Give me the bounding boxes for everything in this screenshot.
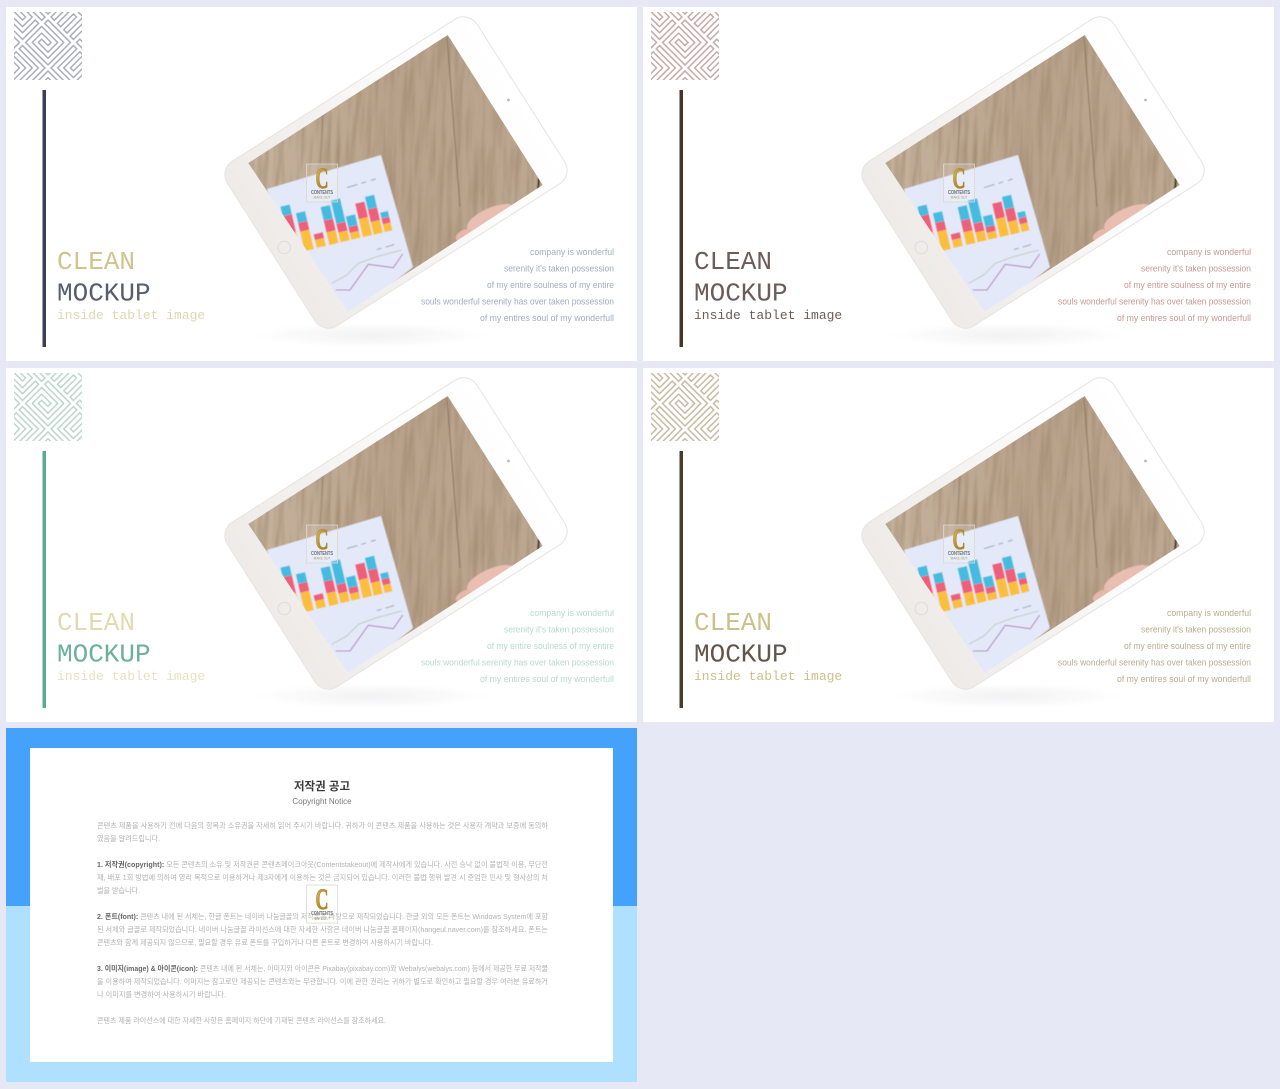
section 3: image and icon bbox=[97, 964, 548, 999]
heading: MOCKUP bbox=[57, 278, 151, 308]
section 3: image and icon: 나 이미지를 변경하여 사용하시기 바랍니다. bbox=[97, 990, 226, 999]
right text block: of my entire soulness of my entire bbox=[487, 280, 614, 290]
notice title: 저작권 공고 bbox=[294, 779, 350, 793]
section 2: font: 된 서체와 글꼴로 제작되었습니다. 네이버 나눔글꼴 라이선스에 대한 자세한 사항은 네이버 나눔글꼴 홈페이지(hangeul.naver.com)를 참조하세요. 폰트는 bbox=[97, 925, 548, 934]
heading: inside tablet image bbox=[694, 669, 842, 684]
right text block: souls wonderful serenity has over taken possession bbox=[421, 296, 614, 306]
heading: inside tablet image bbox=[694, 308, 842, 323]
logo watermark: MAKE OUT bbox=[314, 196, 330, 200]
heading: inside tablet image bbox=[57, 308, 205, 323]
heading bbox=[694, 247, 842, 323]
logo watermark bbox=[306, 163, 338, 202]
section 1: copyright: 1. 저작권(copyright): 모든 콘텐츠의 소유 및 저작권은 콘텐츠메이크아웃(Contentstakeout)에 제작사에게 있습니다. 사전 승낙 없이 불법적 이용, 무단전 bbox=[97, 860, 548, 869]
maze pattern tile bbox=[0, 333, 118, 473]
logo watermark bbox=[944, 524, 974, 563]
right text block bbox=[421, 608, 614, 684]
tablet mockup bbox=[854, 1, 1210, 349]
logo watermark bbox=[944, 163, 974, 202]
notice subtitle: Copyright Notice bbox=[292, 797, 352, 806]
heading: CLEAN bbox=[694, 608, 772, 638]
logo watermark: CONTENTS bbox=[948, 551, 971, 557]
right text block: company is wonderful bbox=[530, 608, 614, 618]
logo watermark: MAKE OUT bbox=[951, 196, 967, 200]
right text block: company is wonderful bbox=[1167, 247, 1251, 257]
panel: copyright notice slide bbox=[6, 728, 637, 1082]
vertical accent bar bbox=[680, 90, 683, 347]
right text block bbox=[1058, 247, 1251, 323]
heading: MOCKUP bbox=[694, 640, 788, 670]
heading: MOCKUP bbox=[694, 278, 788, 308]
logo watermark: CONTENTS bbox=[311, 551, 334, 557]
right text block: of my entires soul of my wonderfull bbox=[480, 674, 614, 684]
section 3: image and icon: 3. 이미지(image) & 아이콘(icon): 콘텐츠 내에 된 서체는, 이미지와 아이콘은 Pixabay(pixabay.com)와 Webalys(webalys.com) 등에서 제공한 무료 저작물 bbox=[97, 964, 548, 973]
section 3: image and icon: 을 이용하여 제작되었습니다. 이미지는 참고로만 제공되는 콘텐츠와는 무관합니다. 이에 관한 권리는 귀하가 별도로 확인하고 필요할 경우 여러분 유료하거 bbox=[97, 977, 548, 986]
maze pattern tile bbox=[0, 0, 118, 112]
right text block: serenity it's taken possession bbox=[504, 624, 614, 634]
right text block: souls wonderful serenity has over taken possession bbox=[421, 658, 614, 668]
right text block bbox=[1058, 608, 1251, 684]
right text block: company is wonderful bbox=[530, 247, 614, 257]
logo watermark: MAKE OUT bbox=[951, 556, 967, 560]
heading bbox=[57, 247, 205, 323]
closing line: 콘텐츠 제품 라이선스에 대한 자세한 사항은 홈페이지 하단에 기재된 콘텐츠 라이선스를 참조하세요. bbox=[97, 1016, 386, 1025]
right text block: serenity it's taken possession bbox=[1141, 264, 1251, 274]
intro paragraph bbox=[97, 821, 548, 843]
right text block: serenity it's taken possession bbox=[1141, 624, 1251, 634]
tablet mockup bbox=[217, 362, 573, 710]
maze pattern tile bbox=[615, 333, 755, 473]
right text block: of my entires soul of my wonderfull bbox=[480, 313, 614, 323]
right text block bbox=[421, 247, 614, 323]
heading: CLEAN bbox=[694, 247, 772, 277]
heading bbox=[57, 608, 205, 684]
section 2: font bbox=[97, 912, 548, 947]
section 1: copyright: 재, 배포 1회 방법에 의하여 영리 목적으로 이용하거나 제3자에게 이용하는 것은 금지되어 있습니다. 이러한 불법 행위 발견 시 준엄한 민사 및 형사상의 처 bbox=[97, 873, 548, 882]
heading: inside tablet image bbox=[57, 669, 205, 684]
intro paragraph: 였음을 알려드립니다. bbox=[97, 834, 160, 843]
section 2: font: 콘텐츠와 함께 제공되지 않으므로, 필요할 경우 유료 폰트를 구입하거나 다른 폰트로 변경하여 사용하시기 바랍니다. bbox=[97, 938, 433, 947]
right text block: of my entires soul of my wonderfull bbox=[1117, 674, 1251, 684]
heading bbox=[694, 608, 842, 684]
logo watermark: CONTENTS bbox=[311, 911, 334, 917]
logo watermark: MAKE OUT bbox=[314, 556, 330, 560]
right text block: of my entire soulness of my entire bbox=[487, 641, 614, 651]
section 1: copyright: 벌을 받습니다. bbox=[97, 886, 140, 895]
logo watermark bbox=[306, 884, 338, 923]
heading: CLEAN bbox=[57, 608, 135, 638]
right text block: serenity it's taken possession bbox=[504, 264, 614, 274]
right text block: company is wonderful bbox=[1167, 608, 1251, 618]
logo watermark: CONTENTS bbox=[311, 190, 334, 196]
logo watermark: C bbox=[953, 163, 965, 195]
logo watermark: MAKE OUT bbox=[314, 916, 330, 920]
vertical accent bar bbox=[42, 451, 46, 708]
logo watermark: C bbox=[316, 884, 328, 916]
panel: slide 1 navy bbox=[0, 0, 637, 361]
vertical accent bar bbox=[42, 90, 46, 347]
right text block: of my entires soul of my wonderfull bbox=[1117, 313, 1251, 323]
intro paragraph: 콘텐츠 제품을 사용하기 전에 다음의 항목과 소유권을 자세히 읽어 주시기 바랍니다. 귀하가 이 콘텐츠 제품을 사용하는 것은 사용자 계약과 보증에 동의하 bbox=[97, 821, 548, 830]
right text block: souls wonderful serenity has over taken possession bbox=[1058, 296, 1251, 306]
right text block: of my entire soulness of my entire bbox=[1124, 641, 1251, 651]
logo watermark: C bbox=[953, 524, 965, 556]
section 2: font: 2. 폰트(font): 콘텐츠 내에 된 서체는, 한글 폰트는 네이버 나눔글꼴의 저작물을 바탕으로 제작되었습니다. 한글 외의 모든 폰트는 Windows System에 포함 bbox=[97, 912, 548, 921]
tablet mockup bbox=[217, 1, 573, 349]
panel: slide 3 teal bbox=[0, 333, 637, 722]
right text block: souls wonderful serenity has over taken possession bbox=[1058, 658, 1251, 668]
panel: slide 4 olive bbox=[615, 333, 1274, 722]
logo watermark bbox=[306, 524, 338, 563]
logo watermark: CONTENTS bbox=[948, 190, 971, 196]
tablet mockup bbox=[854, 362, 1210, 710]
logo watermark: C bbox=[316, 524, 328, 556]
maze pattern tile bbox=[615, 0, 755, 112]
panel: slide 2 brown bbox=[615, 0, 1274, 361]
vertical accent bar bbox=[680, 451, 683, 708]
heading: CLEAN bbox=[57, 247, 135, 277]
right text block: of my entire soulness of my entire bbox=[1124, 280, 1251, 290]
section 1: copyright bbox=[97, 860, 548, 895]
logo watermark: C bbox=[316, 163, 328, 195]
heading: MOCKUP bbox=[57, 640, 151, 670]
